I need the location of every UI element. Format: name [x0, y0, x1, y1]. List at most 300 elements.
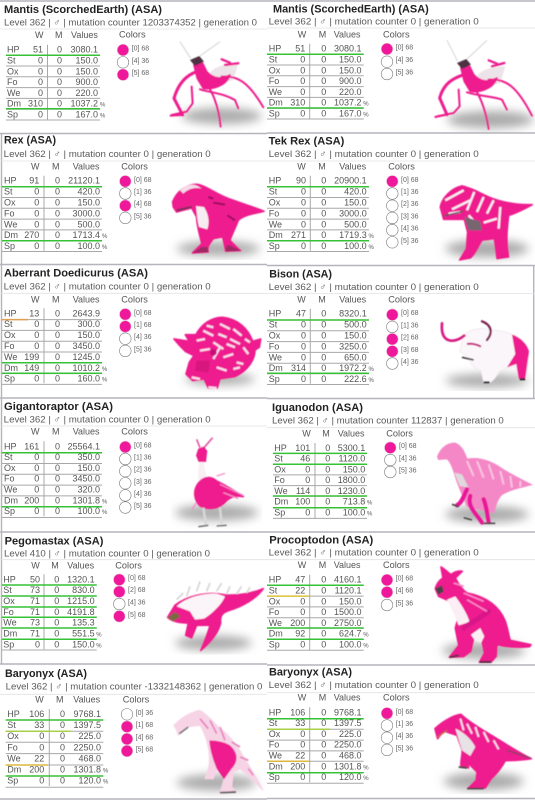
stats table: Sp [269, 241, 280, 251]
stats table: M [55, 30, 62, 40]
stats table: M [52, 294, 60, 304]
stats table: 120.0 [339, 772, 362, 782]
stats table: 1500.0 [334, 607, 362, 617]
stats table: We [4, 352, 17, 362]
stats table: Dm [7, 764, 21, 774]
stats table: We [269, 87, 282, 97]
stats table: 150.0 [339, 65, 362, 75]
stats table: 1397.5 [73, 720, 101, 730]
creature: tek rex [440, 186, 532, 260]
stats table: Values [334, 692, 361, 702]
creature: baryonyx pale [174, 710, 263, 794]
stats table: Dm [269, 230, 283, 240]
stats table: 0 [300, 729, 305, 739]
stats table: 0 [34, 374, 39, 384]
stats table: 21120.1 [68, 176, 100, 186]
stats table: 2250.0 [334, 740, 362, 750]
stats table: M [318, 162, 326, 172]
stats table: 0 [34, 330, 39, 340]
stats table: Fo [269, 607, 279, 617]
stats table: 0 [34, 484, 39, 494]
stats table: 0 [55, 506, 60, 516]
stats table: 1320.1 [67, 574, 95, 584]
stats table: HP [7, 45, 20, 55]
stats table: W [35, 695, 44, 705]
stats table: 1301.8 [73, 764, 101, 774]
colors legend: [5] 36 [396, 745, 413, 752]
stats table: 0 [321, 176, 326, 186]
stats table: 0 [38, 66, 43, 76]
stats table: 0 [60, 753, 65, 763]
stats table: 0 [300, 76, 305, 86]
stats table: 200 [290, 761, 305, 771]
stats table: Fo [274, 475, 285, 485]
stats table: % [363, 102, 369, 108]
stats table: 0 [301, 208, 306, 218]
colors legend: [1] 68 [136, 722, 153, 729]
colors legend: [0] 68 [396, 709, 413, 716]
colors legend [114, 561, 146, 622]
stats table: 3080.1 [70, 45, 98, 55]
stats table: 3000.0 [72, 208, 100, 218]
stats table: 22 [295, 750, 305, 760]
colors legend: [0] 68 [134, 177, 152, 184]
stats table: M [52, 162, 60, 172]
stats table: 3450.0 [72, 341, 100, 351]
stats table: Values [339, 162, 367, 172]
stats table: We [7, 753, 21, 763]
stats table: 0 [300, 109, 305, 119]
stats table: 0 [34, 452, 39, 462]
stats table [2, 561, 102, 650]
panel: Mantis ScorchedEarth, mutation counter 1203374352 [4, 4, 263, 127]
creature: aberrant doedicurus [174, 317, 261, 388]
title: Bison (ASA) [269, 268, 332, 280]
stats table: 199 [24, 352, 39, 362]
stats table: 0 [57, 110, 62, 120]
stats table: 0 [55, 474, 60, 484]
stats table: 71 [30, 628, 40, 638]
stats table: 1245.0 [72, 352, 100, 362]
stats table: 468.0 [78, 753, 101, 763]
stats table: 0 [321, 740, 326, 750]
colors legend: Colors [121, 426, 148, 436]
stats table: 149 [24, 363, 39, 373]
stats table: Sp [269, 772, 280, 782]
stats table: 0 [54, 618, 59, 628]
stats table: 0 [34, 319, 39, 329]
stats table: % [102, 245, 108, 251]
stats table [267, 692, 369, 783]
stats table: Sp [269, 640, 280, 650]
stats table: 310 [28, 99, 43, 109]
stats table: W [298, 29, 307, 39]
stats table: 624.7 [339, 629, 362, 639]
stats table: Fo [269, 208, 279, 218]
stats table: 0 [55, 330, 60, 340]
stats table: % [102, 367, 108, 373]
stats table [2, 294, 108, 384]
stats table: 0 [55, 197, 60, 207]
stats table: 1215.0 [67, 596, 95, 606]
stats table: 0 [305, 507, 310, 517]
panel: Aberrant Doedicurus [2, 268, 261, 388]
stats table: % [102, 234, 108, 240]
colors legend: [4] 36 [134, 334, 152, 341]
stats table: % [363, 113, 369, 119]
colors legend [384, 429, 417, 478]
stats table: 500.0 [77, 219, 100, 229]
stats table: 20900.1 [334, 176, 367, 186]
stats table: 120.0 [78, 776, 101, 786]
stats table: 0 [55, 208, 60, 218]
stats table: 100 [295, 496, 310, 506]
stats table: HP [269, 176, 281, 186]
stats table: 0 [60, 742, 65, 752]
stats table: 0 [54, 574, 59, 584]
panel: Rex [2, 135, 264, 256]
colors legend: [1] 36 [396, 721, 413, 728]
stats table: 0 [38, 110, 43, 120]
stats table: % [96, 632, 102, 638]
stats table: 100.0 [77, 241, 100, 251]
stats table: 0 [300, 65, 305, 75]
stats table: Values [73, 294, 100, 304]
subtitle: Level 410 | ♂ | mutation counter 0 | generation 0 [4, 548, 210, 558]
stats table: % [363, 765, 369, 771]
stats table: 101 [295, 443, 310, 453]
stats table: 8320.1 [339, 309, 367, 319]
stats table: 2643.9 [72, 308, 100, 318]
stats table: 3450.0 [72, 474, 100, 484]
stats table: 0 [321, 596, 326, 606]
stats table: 314 [291, 363, 306, 373]
stats table: Dm [274, 496, 288, 506]
stats table: 0 [34, 219, 39, 229]
stats table: 420.0 [344, 187, 367, 197]
colors legend: [4] 36 [134, 491, 152, 498]
stats table: 0 [55, 463, 60, 473]
stats table: HP [269, 309, 281, 319]
stats table: % [103, 768, 109, 774]
stats table: 0 [321, 707, 326, 717]
stats table: 0 [39, 742, 44, 752]
subtitle: Level 362 | ♂ | mutation counter 0 | generation 0 [269, 680, 479, 690]
stats table: % [102, 499, 108, 505]
stats table: 0 [57, 56, 62, 66]
stats table: 0 [55, 452, 60, 462]
stats table: 0 [325, 443, 330, 453]
title: Rex (ASA) [4, 135, 56, 147]
stats table: % [102, 510, 108, 516]
stats table: Fo [269, 76, 279, 86]
colors legend: [0] 68 [399, 443, 417, 450]
creature: mantis [435, 40, 534, 129]
stats table: 310 [290, 98, 305, 108]
stats table: 90 [296, 176, 306, 186]
stats table: 50 [30, 574, 40, 584]
stats table: We [269, 750, 282, 760]
creature: bison [442, 321, 529, 387]
creature: baryonyx pink [435, 714, 531, 790]
stats table: 4191.8 [67, 607, 95, 617]
subtitle: Level 362 | ♂ | mutation counter 0 | generation 0 [4, 149, 211, 159]
stats table: M [319, 29, 326, 39]
stats table [267, 294, 374, 384]
stats table: M [322, 429, 330, 439]
stats table: 0 [321, 197, 326, 207]
title: Baryonyx (ASA) [269, 666, 352, 678]
stats table: Ox [7, 66, 19, 76]
colors legend: [1] 36 [401, 189, 419, 196]
stats table: 0 [55, 241, 60, 251]
stats table: 150.0 [339, 596, 362, 606]
colors legend: [5] 36 [134, 503, 152, 510]
panel: Gigantoraptor [2, 401, 258, 527]
creature: iguanodon [438, 443, 531, 523]
stats table: 150.0 [77, 463, 100, 473]
stats table: 0 [34, 341, 39, 351]
stats table: % [369, 367, 375, 373]
panel: Tek Rex [267, 136, 532, 260]
colors legend: [2] 68 [128, 587, 146, 594]
colors legend: Colors [115, 561, 142, 571]
stats table: Dm [3, 628, 17, 638]
colors legend: [1] 68 [134, 322, 152, 329]
stats table: 0 [60, 764, 65, 774]
colors legend: [0] 68 [134, 310, 152, 317]
stats table: 0 [34, 197, 39, 207]
stats table: M [318, 294, 326, 304]
stats table: 0 [55, 219, 60, 229]
stats table: M [56, 695, 64, 705]
stats table: 47 [296, 309, 306, 319]
stats table: 0 [55, 441, 60, 451]
colors legend [117, 30, 149, 80]
stats table: 500.0 [344, 320, 367, 330]
stats table: Sp [274, 507, 285, 517]
stats table: W [298, 560, 307, 570]
stats table: 0 [54, 639, 59, 649]
stats table: 420.0 [77, 187, 100, 197]
panel: Pegomastax [2, 536, 263, 651]
stats table: Values [67, 561, 95, 571]
stats table: 222.6 [344, 374, 367, 384]
stats table: 0 [321, 187, 326, 197]
stats table: We [4, 219, 17, 229]
stats table: 0 [321, 341, 326, 351]
stats table: Values [73, 426, 100, 436]
creature: procoptodon [435, 567, 531, 662]
stats table: Dm [269, 363, 283, 373]
stats table: 0 [321, 363, 326, 373]
stats table: 0 [321, 352, 326, 362]
stats table: 0 [34, 506, 39, 516]
stats table: 0 [301, 197, 306, 207]
stats table: 71 [30, 607, 40, 617]
stats table: HP [269, 707, 281, 717]
stats table: 0 [321, 44, 326, 54]
stats table: W [31, 426, 40, 436]
stats table: Ox [274, 464, 286, 474]
stats table: % [367, 500, 373, 506]
stats table: W [31, 294, 40, 304]
stats table: St [7, 56, 16, 66]
stats table: 0 [55, 187, 60, 197]
colors legend: [4] 36 [401, 359, 419, 366]
stats table: Ox [269, 197, 281, 207]
colors legend [120, 162, 152, 224]
stats table: Ox [4, 330, 16, 340]
title: Mantis (ScorchedEarth) (ASA) [273, 4, 429, 16]
creature: gigantoraptor [175, 438, 258, 527]
colors legend: [4] 36 [128, 600, 146, 606]
stats table: 0 [325, 464, 330, 474]
stats table: HP [4, 308, 17, 318]
stats table: 0 [321, 750, 326, 760]
colors legend [121, 695, 153, 757]
stats table: Dm [269, 98, 283, 108]
colors legend: [0] 36 [136, 710, 153, 717]
stats table: 0 [321, 374, 326, 384]
colors legend: [1] 36 [134, 454, 152, 462]
stats table: 100.0 [77, 506, 100, 516]
stats table: 0 [301, 187, 306, 197]
title: Mantis (ScorchedEarth) (ASA) [4, 4, 162, 16]
stats table: 0 [321, 87, 326, 97]
colors legend [120, 294, 152, 357]
stats table: 135.3 [72, 618, 95, 628]
stats table: 0 [55, 319, 60, 329]
stats table: W [297, 162, 306, 172]
stats table: 0 [321, 772, 326, 782]
stats table: M [52, 426, 60, 436]
stats table: 0 [321, 65, 326, 75]
colors legend: [0] 68 [128, 575, 146, 582]
stats table: We [269, 352, 282, 362]
stats table: Sp [4, 374, 15, 384]
stats table: HP [269, 44, 281, 54]
stats table [267, 560, 369, 650]
colors legend: [1] 36 [401, 322, 419, 329]
stats table: 0 [54, 628, 59, 638]
stats table: HP [3, 574, 16, 584]
stats table: M [319, 560, 326, 570]
stats table: HP [7, 709, 20, 719]
stats table: 468.0 [339, 750, 362, 760]
stats table: % [100, 114, 106, 120]
stats table: St [269, 718, 278, 728]
colors legend: Colors [123, 695, 150, 705]
stats table: Ox [4, 463, 16, 473]
subtitle: Level 362 | ♂ | mutation counter 0 | generation 0 [269, 16, 479, 26]
colors legend: Colors [383, 692, 410, 702]
stats table: 150.0 [344, 197, 367, 207]
stats table: % [100, 103, 106, 109]
stats table: We [274, 486, 288, 496]
stats table: 1230.0 [338, 486, 365, 496]
stats table: Sp [4, 506, 15, 516]
creature: pegomastax [168, 581, 263, 651]
title: Iguanodon (ASA) [272, 402, 363, 414]
panel: Iguanodon [272, 402, 531, 523]
panel: Baryonyx, mutation counter 0 [267, 666, 531, 790]
colors legend: [4] 36 [396, 733, 413, 740]
stats table: St [269, 55, 278, 65]
stats table: 1120.1 [335, 586, 362, 596]
title: Gigantoraptor (ASA) [4, 401, 113, 413]
stats table [2, 426, 108, 518]
stats table: 1301.8 [334, 761, 362, 771]
stats table: 13 [29, 308, 39, 318]
stats table: Values [334, 560, 361, 570]
colors legend: [5] 68 [132, 70, 149, 77]
stats table: 0 [321, 320, 326, 330]
stats table: 167.0 [339, 109, 362, 119]
colors legend: Colors [383, 560, 410, 570]
subtitle: Level 362 | ♂ | mutation counter 0 | generation 0 [269, 548, 479, 558]
stats table: 167.0 [75, 110, 98, 120]
stats table: Values [71, 30, 98, 40]
stats table: 0 [300, 55, 305, 65]
stats table: Dm [4, 363, 18, 373]
colors legend: [3] 68 [401, 347, 419, 354]
stats table: M [319, 692, 326, 702]
stats table: 0 [321, 618, 326, 628]
stats table [273, 429, 373, 518]
title: Aberrant Doedicurus (ASA) [4, 268, 148, 280]
stats table: 0 [301, 320, 306, 330]
stats table: 0 [57, 77, 62, 87]
stats table: St [269, 187, 278, 197]
stats table: 0 [55, 363, 60, 373]
subtitle: Level 362 | ♂ | mutation counter 0 | generation 0 [269, 149, 479, 159]
stats table: 0 [325, 486, 330, 496]
colors legend: [4] 36 [396, 57, 413, 64]
stats table: 0 [321, 629, 326, 639]
stats table: Fo [7, 742, 18, 752]
stats table: 0 [54, 596, 59, 606]
colors legend: [4] 36 [132, 58, 149, 65]
stats table: Ox [7, 731, 19, 741]
stats table: 0 [305, 464, 310, 474]
stats table: 320.0 [77, 484, 100, 494]
stats table: 0 [55, 495, 60, 505]
stats table: 0 [325, 454, 330, 464]
stats table: 0 [54, 607, 59, 617]
stats table: 0 [55, 352, 60, 362]
stats table: 200 [290, 618, 305, 628]
stats table [267, 162, 374, 252]
stats table: 220.0 [75, 88, 98, 98]
stats table: 33 [34, 720, 44, 730]
stats table: Ox [269, 729, 281, 739]
stats table: Dm [4, 230, 18, 240]
stats table: W [31, 162, 40, 172]
stats table: 1120.0 [338, 454, 365, 464]
colors legend: [0] 68 [401, 310, 419, 317]
stats table: 0 [60, 731, 65, 741]
stats table: 46 [300, 454, 310, 464]
stats table: 0 [60, 776, 65, 786]
stats table: HP [4, 441, 17, 451]
colors legend: [0] 68 [132, 46, 149, 52]
stats table: 0 [321, 761, 326, 771]
stats table: Dm [269, 629, 283, 639]
stats table: 0 [321, 586, 326, 596]
stats table: 150.0 [72, 639, 95, 649]
stats table: St [4, 319, 13, 329]
